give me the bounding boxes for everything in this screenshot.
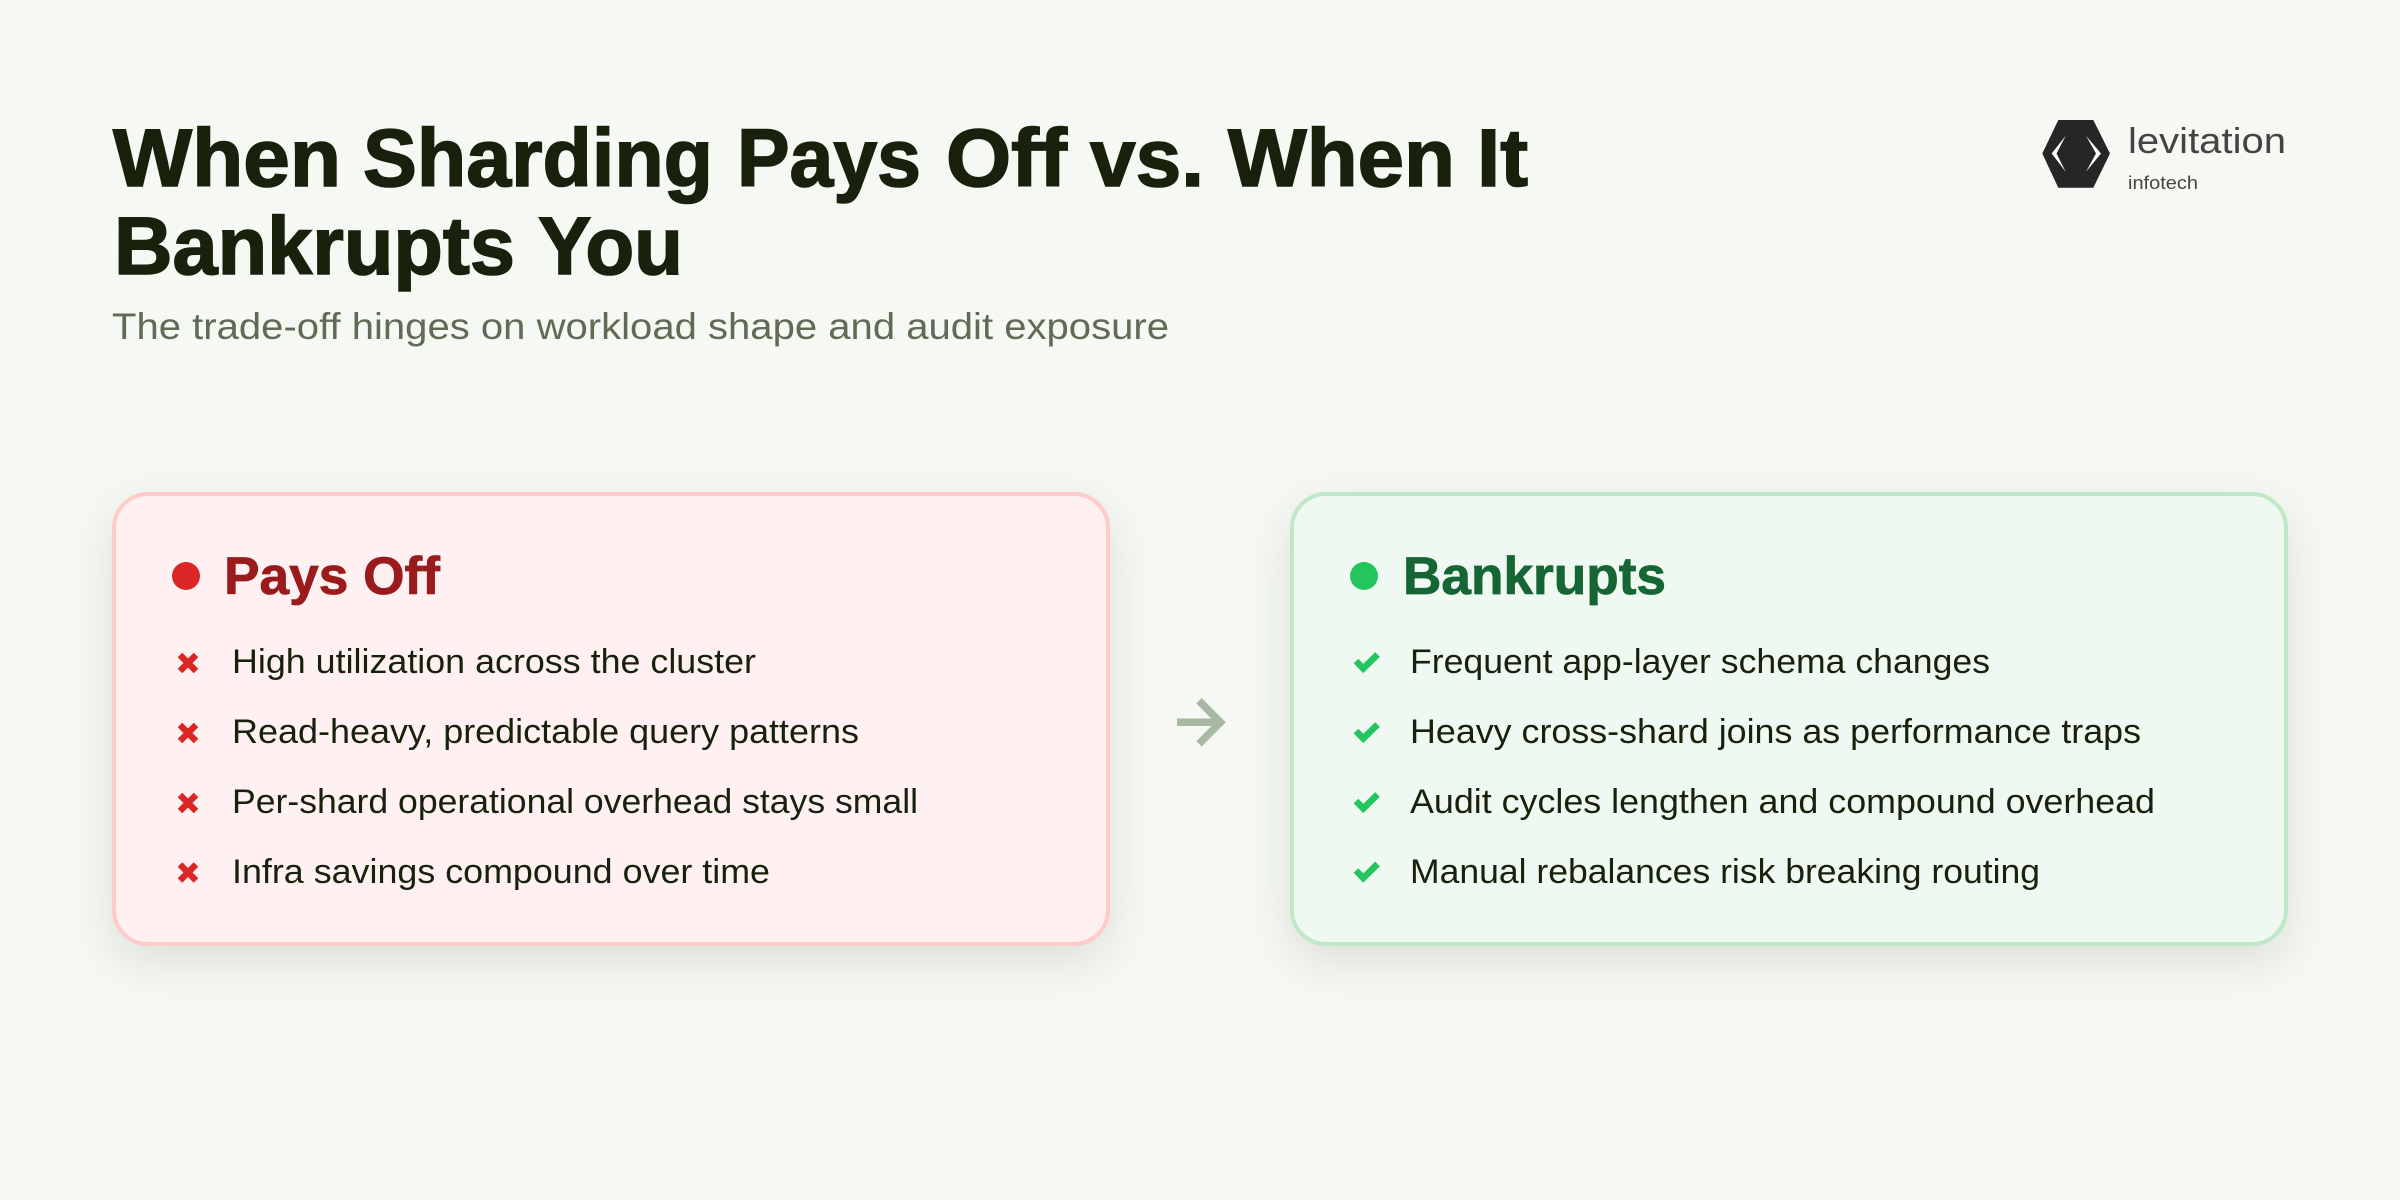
- icon: check: [1356, 654, 1378, 668]
- title: It: [1477, 113, 1528, 204]
- icon: cross: [180, 655, 196, 671]
- status dot: red: [172, 562, 200, 590]
- icon: cross: [180, 864, 196, 880]
- list item 1: High utilization across the cluster: [232, 643, 756, 681]
- title: You: [538, 201, 683, 292]
- title: Pays: [737, 113, 921, 204]
- status dot: green: [1350, 562, 1378, 590]
- heading: pays off: Pays Off: [224, 547, 440, 606]
- logo: levitation infotech: [2042, 120, 2286, 193]
- title: When: [1228, 113, 1455, 204]
- icon: hexagon logo mark: [2042, 120, 2110, 188]
- icon: check: [1356, 864, 1378, 878]
- list item 4: Infra savings compound over time: [232, 853, 770, 891]
- title: vs.: [1090, 113, 1204, 204]
- title: Off: [946, 113, 1068, 204]
- icon: check: [1356, 794, 1378, 808]
- logo wordmark: levitation: [2128, 120, 2286, 161]
- title: Bankrupts: [114, 201, 515, 292]
- list item 3: Audit cycles lengthen and compound overhead: [1410, 783, 2155, 821]
- subtitle: The trade-off hinges on workload shape and audit exposure: [112, 306, 1169, 347]
- icon: cross: [180, 725, 196, 741]
- logo tagline: infotech: [2128, 173, 2198, 193]
- list item 3: Per-shard operational overhead stays small: [232, 783, 918, 821]
- list item 1: Frequent app-layer schema changes: [1410, 643, 1990, 681]
- panel: pays off: [114, 494, 1108, 944]
- panel: bankrupts: [1292, 494, 2286, 944]
- icon: cross: [180, 795, 196, 811]
- title: Sharding: [363, 113, 713, 204]
- list item 4: Manual rebalances risk breaking routing: [1410, 853, 2040, 891]
- list item 2: Read-heavy, predictable query patterns: [232, 713, 859, 751]
- panel background: [1292, 494, 2286, 944]
- heading: bankrupts: Bankrupts: [1403, 547, 1666, 606]
- list item 2: Heavy cross-shard joins as performance traps: [1410, 713, 2141, 751]
- panel background: [114, 494, 1108, 944]
- arrow: [1177, 701, 1220, 744]
- title: [113, 113, 1528, 292]
- icon: check: [1356, 724, 1378, 738]
- title: When: [113, 113, 341, 204]
